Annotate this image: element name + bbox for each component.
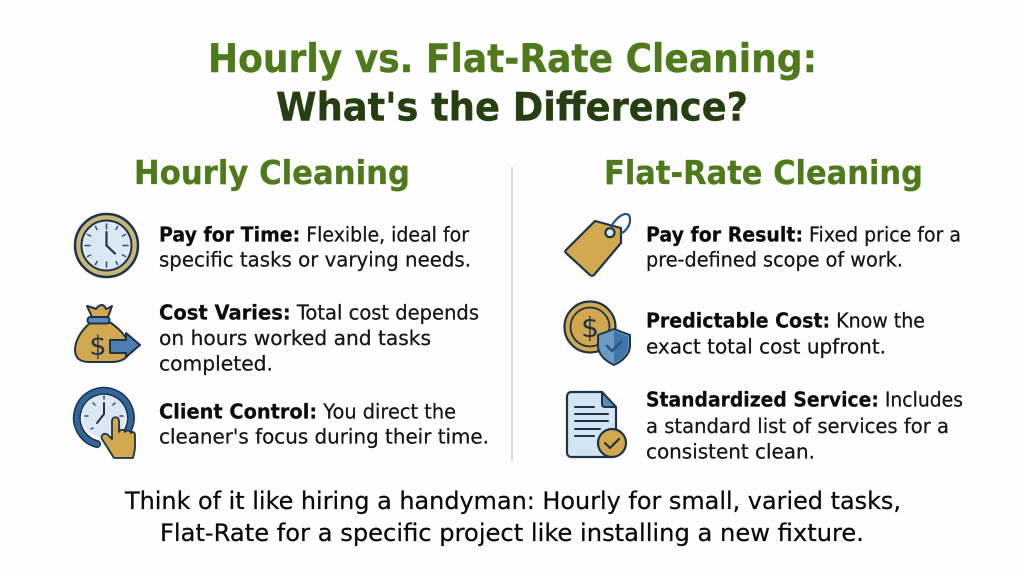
text: predictable cost: exact total cost upfront. (646, 334, 886, 358)
text: pay for result: Pay for Result: Fixed price for a (646, 222, 961, 246)
icon: money bag with arrow: $ (89, 331, 107, 362)
icon: coin with shield (564, 302, 630, 365)
text: standardized service: consistent clean. (646, 440, 815, 464)
heading: flat-rate cleaning: Flat-Rate Cleaning (604, 154, 923, 192)
icon: coin with shield: $ (581, 311, 599, 344)
text: pay for time: specific tasks or varying needs. (159, 248, 471, 272)
icon: price tag (565, 214, 630, 276)
panel: flat-rate cleaning (564, 154, 963, 464)
heading: hourly cleaning: Hourly Cleaning (134, 154, 410, 192)
text: cost varies: on hours worked and tasks (159, 326, 431, 350)
icon: clock with pointing hand (77, 391, 135, 458)
text: standardized service: Standardized Service: Includes (646, 388, 963, 412)
text: client control (159, 400, 489, 448)
icon: document with check (567, 392, 626, 457)
text: standardized service: a standard list of services for a (646, 414, 949, 438)
text: client control: cleaner's focus during their time. (159, 424, 489, 448)
icon: clock (75, 214, 138, 277)
text: client control: Client Control: You direct the (159, 400, 456, 424)
text: standardized service (646, 388, 963, 464)
icon: money bag with arrow (75, 305, 140, 362)
text: cost varies (159, 300, 479, 376)
title: Hourly vs. Flat-Rate Cleaning: (208, 36, 817, 82)
text: pay for time (159, 222, 471, 272)
panel: hourly cleaning (75, 154, 489, 458)
footer note (124, 487, 901, 547)
text: predictable cost (646, 308, 925, 358)
text: predictable cost: Predictable Cost: Know the (646, 308, 925, 332)
text: cost varies: Cost Varies: Total cost depends (159, 300, 479, 324)
text: pay for result (646, 222, 961, 272)
title: What's the Difference? (276, 84, 748, 130)
text: pay for result: pre-defined scope of work. (646, 248, 903, 272)
text: cost varies: completed. (159, 352, 273, 376)
footer note: Flat-Rate for a specific project like installing a new fixture. (160, 519, 864, 547)
footer note: Think of it like hiring a handyman: Hourly for small, varied tasks, (124, 487, 901, 515)
title (208, 36, 817, 130)
text: pay for time: Pay for Time: Flexible, ideal for (159, 222, 470, 246)
